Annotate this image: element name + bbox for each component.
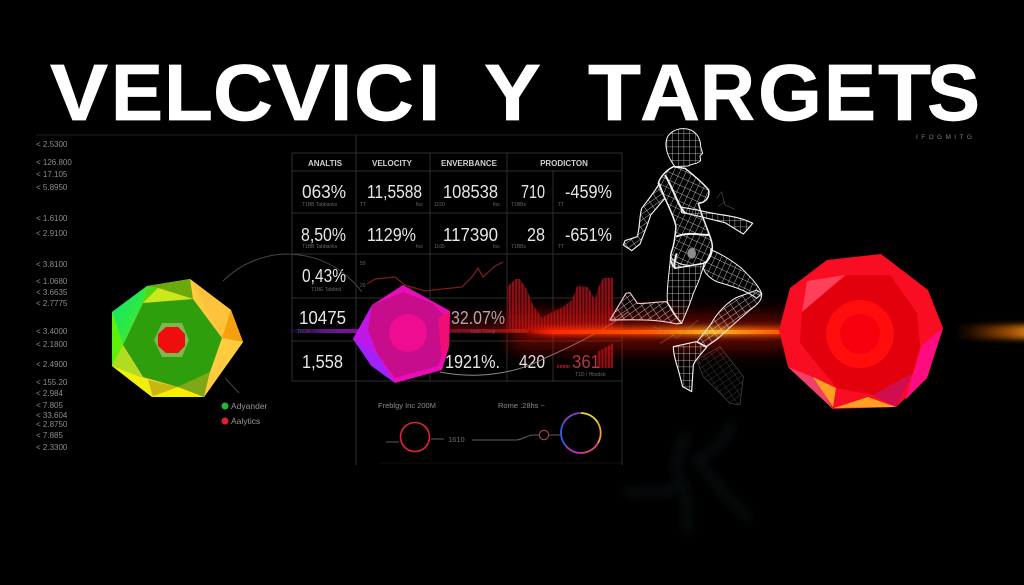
head xyxy=(666,129,703,167)
faint floor reflection xyxy=(623,423,750,533)
legend: Aalytics xyxy=(231,416,260,426)
left axis labels: < 2.1800 xyxy=(36,340,68,349)
title: G xyxy=(758,48,822,137)
table row 2: fos xyxy=(416,244,423,250)
table row 2: 1165 xyxy=(434,244,445,250)
table row 1: 710 xyxy=(521,182,545,202)
left axis labels: < 2.3300 xyxy=(36,443,68,452)
table row 4 xyxy=(297,308,529,335)
table row 1: T1BB Tabbanks xyxy=(302,202,338,208)
left axis labels: < 2.5300 xyxy=(36,140,68,149)
table row 3: T1BE Tabbnd xyxy=(311,287,341,293)
table row 1: -459% xyxy=(565,182,612,202)
table row 5: 361 xyxy=(572,352,600,372)
timeline connector xyxy=(386,435,561,444)
light beam xyxy=(285,314,1024,350)
title xyxy=(50,48,980,137)
legend xyxy=(222,401,268,426)
line chart: 50 xyxy=(360,261,366,267)
title: E xyxy=(824,48,876,137)
timeline labels: Freblgy Inc 200M xyxy=(378,401,436,410)
timeline rainbow ring xyxy=(561,413,601,453)
rear lower leg xyxy=(610,293,682,324)
left axis labels: < 5.8950 xyxy=(36,183,68,192)
table row 3 xyxy=(302,266,346,293)
faint wire scribble on beam xyxy=(653,320,698,343)
gem: red xyxy=(779,254,943,409)
hip shading xyxy=(687,248,696,259)
table row 4: 10475 xyxy=(299,308,346,328)
left axis labels: < 2.984 xyxy=(36,389,63,398)
title: V xyxy=(272,48,330,137)
left axis labels: < 126.800 xyxy=(36,158,72,167)
table headers: PRODICTON xyxy=(540,159,588,168)
table row 5: 1921%. xyxy=(445,352,500,372)
top divider xyxy=(36,134,664,136)
gem: magenta xyxy=(353,285,450,383)
faint wire scribble near chest xyxy=(717,192,735,209)
table row 1: fos xyxy=(416,202,423,208)
bar chart xyxy=(507,278,613,330)
table row 4: T6/2B xyxy=(297,329,311,335)
table row 1: 1150 xyxy=(434,202,445,208)
torso highlights xyxy=(665,175,711,268)
data table grid xyxy=(292,135,622,465)
table row 2: TT xyxy=(558,244,564,250)
table headers: VELOCITY xyxy=(372,159,413,168)
table row 5: 420 xyxy=(519,352,545,372)
title: L xyxy=(164,48,213,137)
title: S xyxy=(927,48,980,137)
table row 2: 117390 xyxy=(443,225,498,245)
small bar chart xyxy=(557,343,613,368)
table headers: ANALTIS xyxy=(308,159,343,168)
timeline connector: 1610 xyxy=(448,435,465,444)
table row 2 xyxy=(301,225,612,250)
table row 1: TT xyxy=(360,202,366,208)
title: A xyxy=(640,48,700,137)
left axis labels: < 7.805 xyxy=(36,401,63,410)
title: I xyxy=(330,48,352,137)
table row 4: Tobb Tolegi xyxy=(470,329,495,335)
title: E xyxy=(111,48,163,137)
line chart: 20 xyxy=(360,283,366,289)
table row 2: 1129% xyxy=(367,225,416,245)
title: R xyxy=(700,48,755,137)
table row 1: TT xyxy=(558,202,564,208)
left axis labels: < 2.8750 xyxy=(36,420,68,429)
timeline small ring xyxy=(539,430,549,440)
table row 1: T1BBs xyxy=(511,202,527,208)
rear thigh xyxy=(667,257,704,323)
torso xyxy=(658,167,712,268)
timeline labels: Rome :28hs ~ xyxy=(498,401,546,410)
table row 1: fos xyxy=(493,202,500,208)
title: V xyxy=(50,48,108,137)
gem: green xyxy=(112,279,243,397)
timeline red ring xyxy=(400,422,430,452)
left axis labels: < 3.4000 xyxy=(36,327,68,336)
table row 3: 0,43% xyxy=(302,266,346,286)
subtitle tag: IFOGMITG xyxy=(916,134,975,141)
table headers xyxy=(308,159,588,168)
legend: Adyander xyxy=(231,401,268,411)
rear arm xyxy=(623,183,665,251)
title: T xyxy=(588,48,641,137)
left axis labels xyxy=(36,140,72,452)
table row 1 xyxy=(302,182,612,208)
table row 1: 11,5588 xyxy=(367,182,422,202)
table row 5: T1D / Hbsdsb xyxy=(575,372,606,378)
wireframe runner xyxy=(610,129,762,405)
title: T xyxy=(878,48,931,137)
raised thigh xyxy=(703,250,762,298)
left axis labels: < 2.4900 xyxy=(36,360,68,369)
table row 2: T1BBs xyxy=(511,244,527,250)
table row 4: 32.07% xyxy=(451,308,505,328)
title: C xyxy=(213,48,273,137)
left axis labels: < 155.20 xyxy=(36,378,68,387)
left axis labels: < 1.6100 xyxy=(36,214,68,223)
left axis labels: < 7.885 xyxy=(36,431,63,440)
connector curves xyxy=(223,254,628,393)
left axis labels: < 3.6635 xyxy=(36,288,68,297)
line chart xyxy=(360,261,503,291)
table row 1: 063% xyxy=(302,182,346,202)
timeline labels xyxy=(378,401,546,410)
shin xyxy=(697,290,762,347)
table row 4: T9s /oe xyxy=(512,329,529,335)
left axis labels: < 17.105 xyxy=(36,170,68,179)
table row 1: 108538 xyxy=(443,182,498,202)
table row 2: fos xyxy=(493,244,500,250)
table row 2: 8,50% xyxy=(301,225,346,245)
left axis labels: < 2.9100 xyxy=(36,229,68,238)
left axis labels: < 1.0680 xyxy=(36,277,68,286)
red glow behind table xyxy=(440,298,622,332)
table row 2: -651% xyxy=(565,225,612,245)
table row 5 xyxy=(302,352,606,378)
table headers: ENVERBANCE xyxy=(441,159,498,168)
title: C xyxy=(354,48,414,137)
title: I xyxy=(418,48,440,137)
ghost rear leg xyxy=(697,347,743,405)
foot xyxy=(673,342,707,392)
table row 5: 1,558 xyxy=(302,352,343,372)
left axis labels: < 3.8100 xyxy=(36,260,68,269)
left axis labels: < 33.604 xyxy=(36,411,68,420)
title: Y xyxy=(484,48,541,137)
front arm xyxy=(682,207,753,234)
table row 2: T1BB Tabbanks xyxy=(302,244,338,250)
left axis labels: < 2.7775 xyxy=(36,299,68,308)
table row 2: 28 xyxy=(527,225,545,245)
